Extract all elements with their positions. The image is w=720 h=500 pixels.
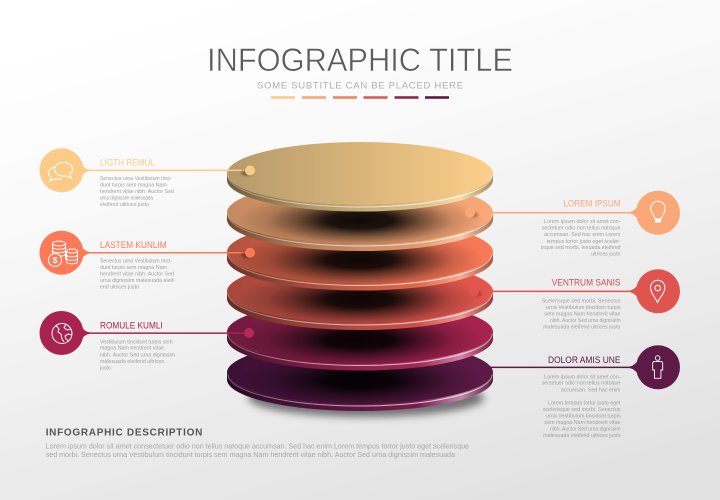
disc 4 [227, 272, 493, 330]
body text: ultrices justo [591, 252, 620, 258]
item: lastem kunlim [40, 231, 255, 291]
body text: isque sed morbi. Iesuada eleifend [541, 245, 620, 251]
body text: urna dignissim malesuada [100, 196, 154, 202]
body text: urna Vestibulum tincidunt turpis [546, 414, 621, 420]
body text: Lorem ipsum dolor sit amet con- [544, 374, 621, 380]
colour dashes [271, 96, 449, 99]
body text: Scelerisque sed morbi. Senectus [542, 299, 621, 305]
body text: malesuada eleifend ultrices [100, 359, 164, 365]
icon: coins: $ [53, 255, 58, 265]
body text: dunt turpis sem magna Nam [100, 265, 167, 271]
body text [541, 219, 621, 258]
body text: justo [99, 365, 111, 371]
body text: magna Nam hendrerit vitae [100, 346, 164, 352]
disc 2 [227, 193, 493, 251]
icon: coins [48, 241, 78, 266]
title: INFOGRAPHIC TITLE [207, 42, 513, 78]
heading: VENTRUM SANIS [552, 276, 620, 288]
teardrop badge [40, 231, 90, 275]
body text: dunt turpis sem magna Nam [100, 183, 167, 189]
body text: end ultrices justo [100, 285, 139, 291]
body text: Senectus urna Vestibulum tinci- [100, 176, 172, 182]
body text: sem magna Nam hendrerit vitae [544, 420, 620, 426]
body text: Vestibulum tincidunt turpis sem [100, 339, 173, 345]
item: lorem ipsum [465, 191, 680, 258]
body text [542, 299, 621, 330]
dot [469, 287, 482, 297]
body text: hendrerit vitae nibh. Auctor Sed [100, 189, 174, 195]
body text: urna dignissim malesuada eleif- [100, 278, 175, 284]
body text: Lorem ipsum dolor sit amet con- [544, 219, 621, 225]
body text [542, 374, 621, 439]
icon: light bulb [651, 201, 665, 222]
disc 6 [227, 352, 493, 411]
body text: nibh. Auctor Sed urna dignissim [100, 352, 175, 358]
connector line: dolor amis une [478, 367, 633, 368]
body text: accumsan. Sed hac enim Lorem [544, 232, 621, 238]
connector and dot [85, 328, 254, 338]
item: dolor amis une [474, 345, 680, 439]
body text: malesuada eleifend ultrices justo [543, 324, 620, 330]
teardrop badge [629, 191, 680, 235]
disc 1 [227, 142, 493, 212]
heading: LIGTH REMUL [100, 156, 155, 168]
disc 3 [227, 232, 493, 290]
heading: ROMULE KUMLI [100, 320, 163, 330]
item: ligth remul [40, 148, 255, 208]
body text: sectetuer odio non tellus natoque [542, 226, 620, 232]
description text [46, 441, 469, 459]
description text: Lorem ipsum dolor sit amet consectetuer odio non tellus natoque accumsan. Sed hac enim Lorem tempus tortor justo eget scelerisque [46, 441, 469, 450]
subtitle: SOME SUBTITLE CAN BE PLACED HERE [257, 80, 463, 92]
icon: speech bubbles [48, 162, 72, 181]
disc 5 [227, 312, 493, 370]
heading: LASTEM KUNLIM [100, 239, 167, 250]
body text: nibh. Auctor Sed urna dignissim [550, 318, 621, 324]
item: ventrum sanis [469, 269, 680, 330]
body text: urna Vestibulum tincidunt turpis [546, 305, 621, 311]
teardrop badge [629, 269, 680, 313]
body text: sectetuer odio non tellus natoque [542, 381, 620, 387]
body text [100, 259, 175, 291]
dot [465, 208, 478, 218]
body text [100, 176, 174, 208]
body text: malesuada eleifend ultrices justo [543, 433, 620, 439]
teardrop badge [40, 311, 90, 355]
body text: Lorem tempus tortor justo eget [548, 400, 621, 406]
item: romule kumli [40, 311, 254, 371]
icon: map pin [650, 280, 665, 302]
heading: LOREM IPSUM [564, 198, 621, 208]
connector and dot [85, 166, 255, 176]
body text: eleifend ultrices justo [100, 202, 149, 208]
teardrop badge [629, 345, 680, 389]
body text: accumsan. Sed hac enim [561, 388, 621, 394]
body text: sem magna Nam hendrerit vitae [544, 312, 620, 318]
connector line: lorem ipsum [470, 212, 634, 214]
connector and dot [85, 248, 255, 258]
body text: scelerisque sed morbi. Senectus [543, 407, 621, 413]
body text [99, 339, 175, 371]
description heading: INFOGRAPHIC DESCRIPTION [46, 428, 202, 438]
description text: sed morbi. Senectus urna Vestibulum tincidunt turpis sem magna Nam hendrerit vitae nibh. Auctor Sed urna dignissim malesuada [46, 450, 456, 459]
teardrop badge [40, 148, 90, 192]
disc stack [227, 142, 493, 411]
icon: person [653, 356, 663, 378]
ground shadow [248, 379, 484, 417]
body text: nibh. Auctor Sed urna dignissim [550, 427, 621, 433]
heading: DOLOR AMIS UNE [548, 354, 620, 365]
body text: hendrerit vitae nibh. Auctor Sed [100, 271, 174, 277]
icon: globe [52, 324, 72, 344]
body text: tempus tortor justo eget sceler- [547, 239, 621, 245]
connector line: ventrum sanis [474, 291, 634, 292]
body text: Senectus urna Vestibulum tinci- [100, 259, 172, 265]
dot [474, 364, 482, 374]
